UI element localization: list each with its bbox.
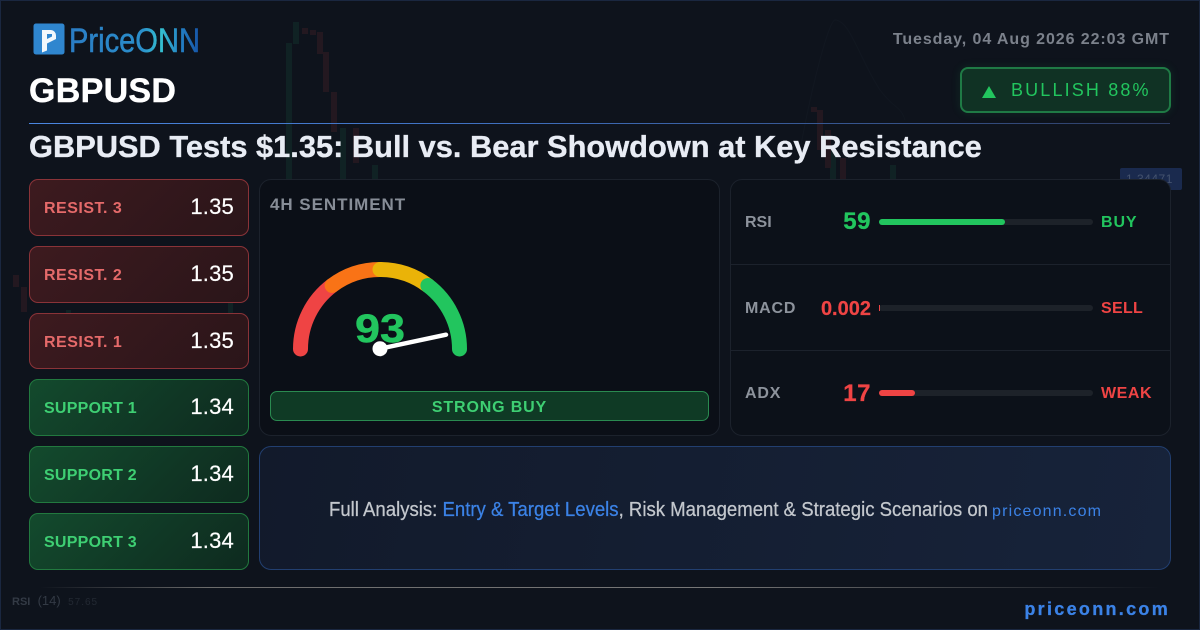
panel: 4H sentiment [259,179,720,436]
header divider [29,123,1170,124]
level: support 3: 1.34 [190,528,234,553]
sentiment heading: 4H SENTIMENT [270,195,406,214]
date and time: Tuesday, 04 Aug 2026 22:03 GMT [893,31,1170,48]
symbol heading: GBPUSD [29,72,176,110]
RSI value: 59 [843,208,871,235]
ADX label: ADX [745,385,781,402]
MACD bar [879,305,1093,311]
level: resistance 3: RESIST. 3 [44,200,122,217]
signal pill: STRONG BUY [432,399,547,416]
MACD value: 0.002 [821,298,871,320]
gauge: 93 [355,307,405,351]
sentiment badge [960,67,1171,113]
level: support 1: 1.34 [190,394,234,419]
level: support 2: SUPPORT 2 [44,467,137,484]
ADX signal: WEAK [1101,385,1152,402]
level: support 3 [29,513,249,570]
level: resistance 2: 1.35 [190,261,234,286]
signal pill [270,391,709,421]
level: resistance 1: RESIST. 1 [44,334,122,351]
level: resistance 2: RESIST. 2 [44,267,122,284]
background: RSI chart label: RSI (14) 57.65 [12,593,98,608]
headline: GBPUSD Tests $1.35: Bull vs. Bear Showdown at Key Resistance [29,129,982,164]
RSI signal: BUY [1101,214,1137,231]
footer site link: priceonn.com [1024,599,1170,619]
level: support 3: SUPPORT 3 [44,534,137,551]
level: support 2 [29,446,249,503]
RSI bar [879,219,1093,225]
MACD label: MACD [745,300,796,317]
level: resistance 1 [29,313,249,369]
price tag: background chart [1120,168,1182,190]
level: support 1: SUPPORT 1 [44,400,137,417]
level: resistance 3: 1.35 [190,194,234,219]
gauge [293,262,467,356]
call-to-action banner [259,446,1171,570]
call-to-action text: Full Analysis: Entry & Target Levels, Risk Management & Strategic Scenarios on [329,499,988,521]
triangle icon [982,86,996,98]
level: resistance 1: 1.35 [190,328,234,353]
RSI label: RSI [745,214,772,231]
level: support 2: 1.34 [190,461,234,486]
level: resistance 3 [29,179,249,236]
footer divider [40,587,1160,588]
call-to-action text: priceonn.com [992,503,1101,520]
ADX bar [879,390,1093,396]
ADX value: 17 [843,380,871,407]
sentiment badge: BULLISH 88% [1011,80,1151,100]
level: support 1 [29,379,249,436]
row dividers [731,264,1170,265]
MACD signal: SELL [1101,300,1143,317]
level: resistance 2 [29,246,249,303]
panel: indicators [730,179,1171,436]
price tag: background chart: 1.34471 [1126,172,1173,186]
